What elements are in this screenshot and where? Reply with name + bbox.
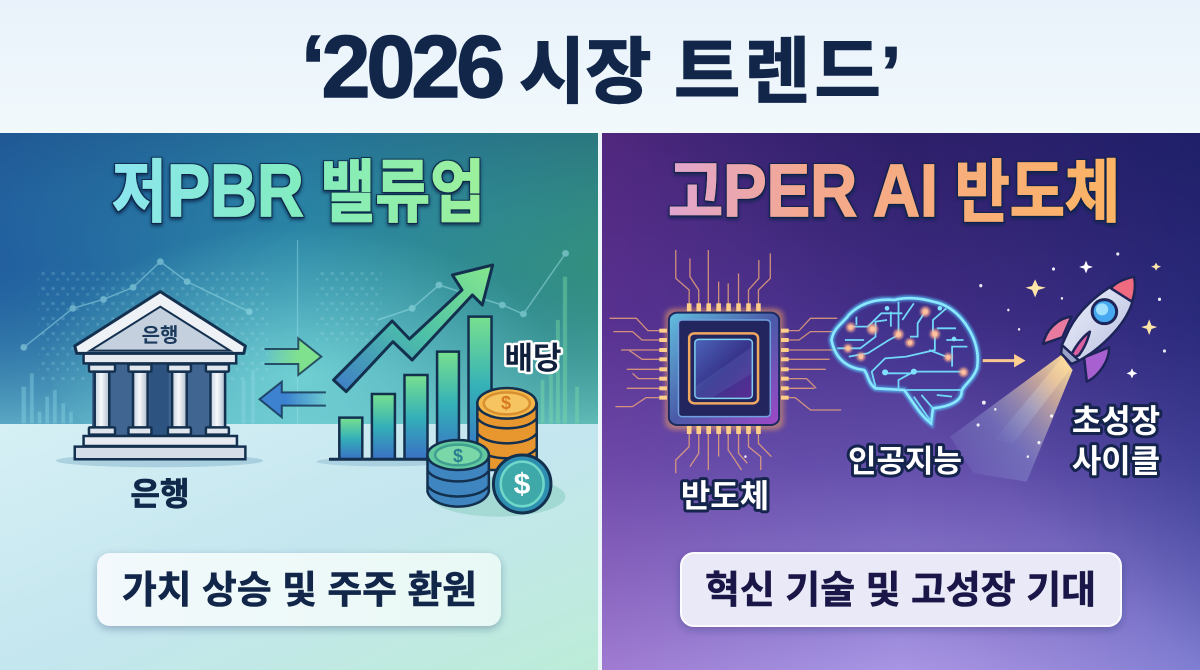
coin dollar signs: $ xyxy=(514,468,531,501)
icon: semiconductor chip xyxy=(610,250,841,473)
title: 트렌드 xyxy=(674,33,885,113)
coin dollar signs: $ xyxy=(453,446,463,466)
icon: coin stacks xyxy=(427,388,566,517)
callout: 가치 상승 및 주주 환원: 가치 상승 및 주주 환원 xyxy=(122,570,477,612)
title: 시장 xyxy=(519,33,671,113)
callout: 혁신 기술 및 고성장 기대: 혁신 기술 및 고성장 기대 xyxy=(705,570,1096,612)
callout: 혁신 기술 및 고성장 기대 xyxy=(681,553,1121,626)
icon: growth arrow xyxy=(334,265,493,392)
label: 반도체: 반도체 xyxy=(681,478,769,514)
arrow: brain to rocket xyxy=(983,354,1026,367)
dividend label: 배당 xyxy=(504,341,562,376)
heading: 저PBR 밸류업: 저PBR 밸류업 xyxy=(112,149,485,232)
bank pediment label: 은행 xyxy=(142,324,178,347)
title: ‘2026 xyxy=(301,17,522,116)
icon: rocket with stars xyxy=(744,252,1166,482)
arrow: to growth xyxy=(265,338,321,375)
panel: 고PER AI 반도체 xyxy=(602,133,1200,670)
label: 초성장 사이클: 사이클 xyxy=(1072,443,1160,479)
bank caption: 은행 xyxy=(131,476,189,512)
icon: bank building xyxy=(56,292,263,467)
background chart pattern xyxy=(20,240,579,423)
coin dollar signs xyxy=(453,393,531,501)
callout: 가치 상승 및 주주 환원 xyxy=(97,553,501,626)
label: 초성장 사이클 xyxy=(1072,403,1160,479)
bar chart xyxy=(316,317,492,466)
heading: 고PER AI 반도체: 고PER AI 반도체 xyxy=(668,149,1120,232)
coin dollar signs: $ xyxy=(501,393,511,413)
panel: 저PBR 밸류업 xyxy=(0,133,598,670)
label: 인공지능: 인공지능 xyxy=(848,444,962,479)
icon: AI brain xyxy=(832,298,978,423)
label: 초성장 사이클: 초성장 xyxy=(1072,403,1160,439)
arrow: to bank xyxy=(260,382,326,417)
header background xyxy=(0,0,1200,133)
title: ’ xyxy=(881,33,901,113)
